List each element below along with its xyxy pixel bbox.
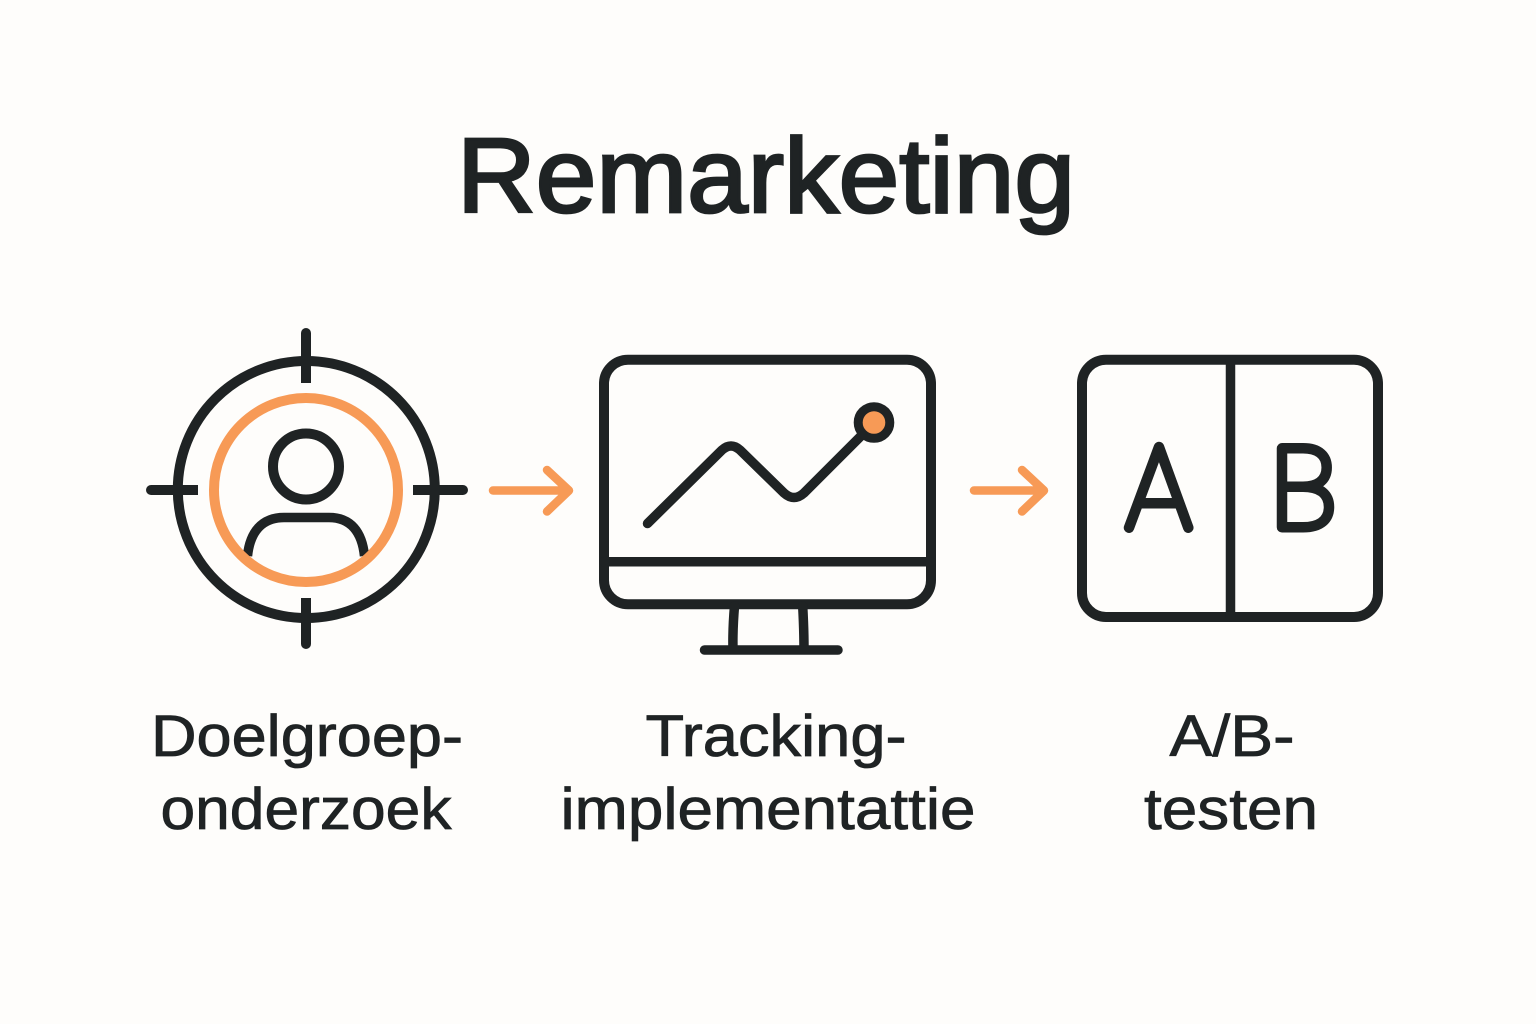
screen frame [604, 360, 931, 604]
outer ring [178, 361, 435, 618]
label: A/B-testen: testen [1144, 777, 1318, 842]
icon: A/B test panel [1082, 360, 1378, 617]
label: A/B-testen [1144, 704, 1318, 842]
letter B [1282, 448, 1329, 527]
letter A [1129, 447, 1188, 528]
screen divider [604, 557, 931, 566]
panel frame [1082, 360, 1378, 617]
icon: tracking monitor [604, 360, 931, 650]
person head [273, 434, 339, 500]
label: Doelgroep-onderzoek: Doelgroep- [151, 704, 463, 769]
chart end dot [858, 407, 890, 438]
line chart [648, 436, 861, 524]
label: Doelgroep-onderzoek [151, 704, 463, 842]
label: A/B-testen: A/B- [1170, 704, 1294, 769]
monitor stand [704, 606, 838, 650]
person shoulders [248, 518, 364, 556]
crosshair ticks [146, 328, 468, 649]
label: Tracking-implementattie [560, 704, 976, 842]
icon: audience target [146, 328, 468, 649]
label: Tracking-implementattie: Tracking- [646, 704, 906, 769]
label: Tracking-implementattie: implementattie [560, 777, 976, 842]
orange focus ring [214, 398, 398, 582]
arrow: target to monitor [493, 470, 569, 512]
panel divider [1226, 360, 1235, 617]
arrow: monitor to A/B test [974, 470, 1044, 512]
title: Remarketing [457, 117, 1075, 235]
label: Doelgroep-onderzoek: onderzoek [160, 777, 453, 842]
